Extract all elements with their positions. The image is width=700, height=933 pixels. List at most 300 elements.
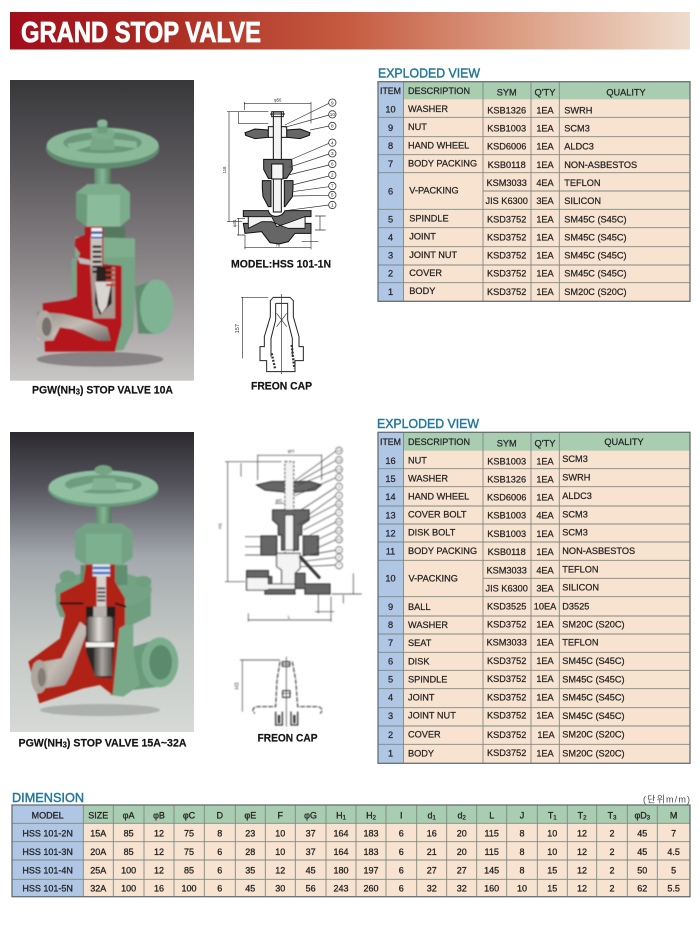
table: dimension: 25A	[90, 865, 106, 875]
diagram: section 15A-32A: φH	[288, 449, 294, 454]
table: dimension: HSS 101-2N	[22, 829, 73, 839]
table: dimension: φC	[183, 810, 196, 820]
table: dimension: d	[458, 810, 463, 820]
table: dimension: 12	[275, 865, 285, 875]
table: exploded view 2: 1EA	[536, 529, 555, 539]
table: dimension: 12	[154, 847, 164, 857]
table: dimension: 85	[124, 829, 134, 839]
table: exploded view 2: JOINT	[408, 693, 435, 703]
diagram: HSS 101-1N section	[222, 97, 336, 249]
table: exploded view 2: 15	[385, 474, 396, 484]
table: exploded view 1: 4EA	[536, 178, 555, 188]
table: dimension: 6	[217, 883, 222, 893]
table: dimension: 5.5	[667, 883, 680, 893]
callout numbers: 3	[331, 151, 334, 156]
table: dimension: 75	[184, 829, 194, 839]
table: dimension: 6	[399, 829, 404, 839]
caption: valve 10A: 3	[76, 388, 80, 396]
table: exploded view 2: 11	[386, 547, 395, 557]
table: exploded view 2: 1EA	[537, 730, 556, 740]
callout numbers: 9	[338, 547, 341, 552]
table: exploded view 2: JOINT NUT	[408, 711, 456, 721]
table: dimension: F	[278, 810, 284, 820]
table: dimension: 30	[275, 883, 285, 893]
table: dimension: H	[336, 810, 343, 820]
callout numbers: 10	[337, 519, 342, 524]
table: dimension: 20	[457, 847, 467, 857]
table: dimension: 115	[485, 829, 499, 839]
callout numbers: 8	[331, 124, 334, 129]
table: exploded view 2: 3EA	[536, 583, 555, 593]
table: dimension: 8	[519, 847, 525, 857]
table: exploded view 1: 10	[385, 105, 396, 115]
table: exploded view 2: SYM	[497, 438, 517, 448]
table: exploded view 2: DISK	[408, 656, 430, 666]
table: dimension: 56	[306, 883, 316, 893]
diagram: freon cap 2: H3	[234, 683, 240, 689]
table: exploded view 1: 3	[388, 250, 393, 260]
table: dimension: 85	[124, 847, 134, 857]
diagram: section 15A-32A: H1	[218, 523, 223, 529]
diagram: freon cap 1: 157	[235, 324, 241, 333]
table: exploded view 1: COVER	[409, 268, 442, 278]
table: exploded view 2: V-PACKING	[408, 573, 458, 583]
table: exploded view 1: SM45C (S45C)	[564, 269, 627, 279]
table: exploded view 2: 1EA	[536, 638, 555, 648]
table: exploded view 2: 1EA	[536, 692, 555, 702]
table: exploded view 1: 8	[388, 141, 393, 151]
table: exploded view 1: KSM3033	[487, 178, 527, 188]
table: exploded view 2: 4EA	[536, 565, 555, 575]
table: dimension: 32A	[90, 883, 106, 893]
table: exploded view 1: V-PACKING	[409, 186, 459, 196]
table: dimension: 160	[484, 883, 499, 893]
table: exploded view 2: KSB0118	[488, 547, 526, 557]
table: dimension: 45	[306, 865, 316, 875]
table: exploded view 2: KSM3033	[487, 565, 527, 575]
table: dimension: 15	[547, 883, 557, 893]
table: exploded view 2: 16	[385, 456, 396, 466]
table: dimension: 10	[547, 829, 557, 839]
unit note: (단위m/m)	[643, 794, 690, 804]
table: dimension: 12	[577, 865, 587, 875]
table: dimension: 2	[609, 829, 615, 839]
table: dimension: 8	[519, 865, 525, 875]
table: dimension: MODEL	[32, 810, 64, 820]
table: dimension: 164	[333, 829, 349, 839]
table: exploded view 2: SM45C (S45C)	[562, 711, 625, 721]
table: exploded view 1: JOINT NUT	[409, 250, 457, 260]
table: exploded view 2: NUT	[408, 455, 427, 465]
table: dimension: T	[608, 810, 613, 820]
table: dimension: 6	[399, 847, 404, 857]
table: exploded view 1: WASHER	[408, 104, 448, 114]
table: exploded view 2: 1	[388, 748, 393, 758]
table: dimension: 45	[637, 847, 647, 857]
table: exploded view 2: COVER BOLT	[408, 510, 467, 520]
table: exploded view 2: Q'TY	[534, 438, 556, 448]
table: exploded view 1: 1EA	[536, 124, 555, 134]
callout numbers: 4	[331, 140, 334, 145]
table: exploded view 2: TEFLON	[562, 638, 599, 648]
table: dimension: φB	[153, 810, 165, 820]
table: exploded view 2: ITEM	[380, 437, 401, 447]
table: exploded view 1: 1	[388, 287, 393, 297]
callout numbers: 12	[337, 537, 342, 542]
callout numbers: 3	[338, 484, 341, 489]
table: dimension: φG	[304, 810, 317, 820]
table: exploded view 2: KSD3752	[487, 674, 526, 684]
diagram: section 15A-32A: φG	[276, 498, 283, 503]
table: exploded view 2: 1EA	[536, 492, 555, 502]
table: exploded view 2: 1EA	[536, 547, 555, 557]
diagram: HSS 101-1N section: 76	[275, 243, 281, 248]
callout numbers: 4	[338, 493, 341, 498]
table: dimension: HSS 101-5N	[22, 883, 73, 893]
table: exploded view 1: KSD3752	[487, 214, 526, 224]
table: exploded view 1: SPINDLE	[409, 214, 449, 224]
table: dimension: 21	[427, 847, 437, 857]
table: exploded view 2: HAND WHEEL	[408, 492, 469, 502]
table: exploded view 1: 6	[388, 186, 393, 196]
heading: dimension: DIMENSION	[12, 790, 84, 805]
table: exploded view 1: JIS K6300	[485, 196, 528, 206]
table: exploded view 2: D3525	[562, 601, 589, 611]
table: dimension: 12	[577, 883, 587, 893]
diagram: HSS 101-1N section: 118	[222, 166, 227, 173]
table: dimension: 45	[637, 829, 647, 839]
table: exploded view 2: NON-ASBESTOS	[562, 546, 635, 556]
callout numbers: 10	[330, 112, 335, 117]
table: dimension: 6	[399, 865, 404, 875]
callout numbers: 9	[331, 100, 334, 105]
table: exploded view 1: Q'TY	[534, 87, 556, 97]
table: exploded view 1: NON-ASBESTOS	[564, 160, 637, 170]
table: exploded view 1: BODY PACKING	[408, 158, 477, 168]
table: exploded view 1: SM20C (S20C)	[564, 287, 627, 297]
heading: exploded view 2: EXPLODED VIEW	[377, 416, 480, 431]
table: exploded view 2: KSD6006	[487, 492, 526, 502]
callout numbers: 11	[337, 501, 342, 506]
table: exploded view 2: 1EA	[536, 674, 555, 684]
table: exploded view 2: KSM3033	[487, 638, 527, 648]
caption: valve 15A-32A: ) STOP VALVE 15A~32A	[67, 738, 187, 750]
table: dimension: 115	[485, 847, 499, 857]
callout numbers: 15	[337, 457, 342, 462]
table: dimension: φE	[244, 810, 256, 820]
table: exploded view 2: SCM3	[562, 454, 588, 464]
callout numbers: 13	[337, 528, 342, 533]
table: exploded view 2: KSB1326	[487, 474, 526, 484]
table: dimension: φA	[123, 810, 135, 820]
table: exploded view 2: SCM3	[562, 509, 588, 519]
table: dimension: 27	[457, 865, 467, 875]
table: exploded view 1: 4	[388, 232, 393, 242]
table: exploded view 2: 9	[388, 602, 393, 612]
table: exploded view 1: SM45C (S45C)	[564, 232, 627, 242]
table: dimension: D	[217, 810, 224, 820]
table: exploded view 1: KSD3752	[487, 287, 526, 297]
table: dimension: 75	[184, 847, 194, 857]
callout numbers: 2	[331, 173, 334, 178]
table: exploded view 1: 1EA	[536, 269, 555, 279]
table: dimension: 2	[609, 847, 615, 857]
table: exploded view 2: 1EA	[536, 711, 555, 721]
table: exploded view 2: KSB1003	[487, 511, 526, 521]
table: exploded view 1: KSD3752	[487, 269, 526, 279]
table: exploded view 2: KSD3752	[487, 620, 526, 630]
table: exploded view 2: 6	[388, 656, 393, 666]
table: exploded view 1: HAND WHEEL	[408, 140, 469, 150]
caption: valve 10A: PGW(NH	[32, 384, 78, 396]
table: exploded view 1	[378, 82, 690, 301]
table: exploded view 2: WASHER	[408, 620, 448, 630]
table: dimension: 183	[363, 847, 379, 857]
table: exploded view 1: KSB1326	[487, 105, 526, 115]
table: exploded view 1: 5	[388, 214, 393, 224]
table: exploded view 2: TEFLON	[562, 564, 599, 574]
callout numbers: 7	[331, 184, 334, 189]
table: exploded view 1: SM45C (S45C)	[564, 250, 627, 260]
table: exploded view 2: 13	[385, 510, 396, 520]
table: exploded view 2: 3	[388, 711, 393, 721]
table: dimension: 243	[333, 883, 349, 893]
table: exploded view 1: 9	[388, 123, 393, 133]
table: exploded view 2: SM45C (S45C)	[562, 693, 625, 703]
table: dimension: 27	[427, 865, 437, 875]
table: exploded view 1: KSD3752	[487, 232, 526, 242]
table: exploded view 1: 1EA	[536, 232, 555, 242]
table: exploded view 2: KSB1003	[487, 456, 526, 466]
heading: exploded view 1: EXPLODED VIEW	[378, 66, 481, 80]
table: exploded view 1: SWRH	[564, 105, 592, 115]
table: dimension: T	[548, 810, 553, 820]
table: exploded view 1: NUT	[408, 122, 427, 132]
table: exploded view 2: COVER	[408, 730, 441, 740]
table: dimension: 2	[373, 815, 377, 821]
table: exploded view 1: 3EA	[536, 196, 555, 206]
table: dimension: 35	[245, 865, 255, 875]
table: dimension: H	[366, 810, 373, 820]
table: exploded view 1: DESCRIPTION	[408, 86, 470, 96]
table: dimension: 6	[217, 847, 222, 857]
table: dimension: HSS 101-3N	[22, 847, 73, 857]
table: exploded view 2: SM20C (S20C)	[562, 730, 625, 740]
table: dimension: 3	[613, 815, 617, 821]
table: exploded view 1: 1EA	[536, 287, 555, 297]
table: dimension: HSS 101-4N	[22, 865, 73, 875]
table: exploded view 1: KSD6006	[487, 142, 526, 152]
table: dimension: 1	[553, 815, 557, 821]
table: exploded view 1: KSB0118	[488, 160, 526, 170]
diagram: freon cap 1	[235, 294, 303, 374]
table: exploded view 2: 12	[385, 528, 396, 538]
callout numbers: 2	[338, 510, 341, 515]
table: dimension: 10	[517, 883, 527, 893]
table: exploded view 1: SILICON	[564, 196, 601, 206]
table: exploded view 2: BODY	[408, 749, 434, 759]
table: exploded view 2: 7	[388, 638, 393, 648]
table: exploded view 2: SM45C (S45C)	[562, 656, 625, 666]
table: exploded view 2: 8	[388, 620, 393, 630]
callout numbers: 5	[338, 475, 341, 480]
table: dimension: 45	[245, 883, 255, 893]
table: exploded view 2	[378, 432, 690, 763]
table: dimension: 1	[343, 815, 347, 821]
callout numbers	[329, 99, 336, 209]
table: dimension: 2	[463, 815, 467, 821]
caption: freon cap 1: FREON CAP	[251, 380, 312, 392]
table: exploded view 2: JIS K6300	[485, 583, 528, 593]
table: exploded view 1: 1EA	[536, 142, 555, 152]
table: exploded view 2: SEAT	[408, 638, 432, 648]
table: dimension: 28	[245, 847, 255, 857]
table: exploded view 2: SCM3	[562, 528, 588, 538]
callout numbers: 1	[331, 203, 334, 208]
table: dimension: T	[578, 810, 583, 820]
table: exploded view 1: KSB1003	[487, 124, 526, 134]
table: exploded view 2: 1EA	[536, 620, 555, 630]
table: dimension: 16	[154, 883, 164, 893]
table: exploded view 1: KSD3752	[487, 250, 526, 260]
table: exploded view 1: 7	[388, 159, 393, 169]
table: exploded view 1: ALDC3	[564, 142, 594, 152]
caption: model HSS 101-1N: MODEL:HSS 101-1N	[231, 258, 331, 270]
table: dimension: 10	[547, 847, 557, 857]
table: exploded view 2: DESCRIPTION	[408, 437, 470, 447]
table: exploded view 2: 2	[388, 730, 393, 740]
table: dimension: 100	[121, 883, 136, 893]
table: exploded view 1: JOINT	[409, 232, 436, 242]
caption: valve 15A-32A: PGW(NH	[18, 738, 64, 750]
table: dimension: 1	[433, 815, 437, 821]
table: exploded view 1: 1EA	[536, 105, 555, 115]
table: exploded view 1: SCM3	[564, 124, 590, 134]
table: dimension: 10	[275, 829, 285, 839]
photo: valve 10A	[10, 80, 194, 381]
callout numbers: 8	[338, 555, 341, 560]
table: exploded view 2: WASHER	[408, 473, 448, 483]
diagram: section 15A-32A: L	[288, 614, 291, 619]
table: dimension: 23	[245, 829, 255, 839]
photo: valve 15A-32A	[10, 432, 194, 732]
table: exploded view 2: 1EA	[536, 656, 555, 666]
table: exploded view 2: KSD3752	[487, 711, 526, 721]
table: exploded view 1: ITEM	[380, 86, 401, 96]
table: dimension: 37	[306, 829, 316, 839]
table: exploded view 1: SM45C (S45C)	[564, 214, 627, 224]
table: dimension: 183	[363, 829, 379, 839]
table: dimension: L	[489, 810, 494, 820]
diagram: freon cap 2	[234, 657, 322, 727]
table: dimension: 260	[363, 883, 379, 893]
table: dimension: 85	[184, 865, 194, 875]
table: exploded view 2: KSD3752	[487, 656, 526, 666]
callout numbers: 7	[338, 563, 341, 568]
table: exploded view 2: BODY PACKING	[408, 546, 477, 556]
diagram: HSS 101-1N section: φ56	[274, 97, 282, 102]
table: dimension: 100	[181, 883, 197, 893]
table: dimension: 10	[275, 847, 285, 857]
table: dimension: 145	[484, 865, 499, 875]
table: exploded view 1: SYM	[497, 87, 517, 97]
table: exploded view 2: 14	[385, 492, 396, 502]
table: dimension: 15A	[90, 829, 106, 839]
table: dimension: 2	[583, 815, 587, 821]
table: exploded view 2: KSD3752	[487, 730, 526, 740]
table: dimension: 164	[333, 847, 349, 857]
table: exploded view 1: 1EA	[536, 160, 555, 170]
table: exploded view 2: SWRH	[562, 473, 590, 483]
table: dimension: 197	[363, 865, 379, 875]
table: dimension: 62	[637, 883, 647, 893]
table: dimension: 16	[427, 829, 437, 839]
table: dimension: 37	[306, 847, 316, 857]
table: dimension: 8	[519, 829, 525, 839]
table: dimension: 32	[457, 883, 467, 893]
callout numbers: 16	[337, 448, 342, 453]
table: dimension	[12, 805, 690, 897]
caption: valve 10A: ) STOP VALVE 10A	[80, 384, 173, 396]
table: exploded view 1: QUALITY	[606, 87, 646, 97]
table: dimension: 100	[121, 865, 136, 875]
table: dimension: 4.5	[667, 847, 680, 857]
table: exploded view 2: KSB1003	[487, 529, 526, 539]
table: dimension: 12	[577, 829, 587, 839]
table: dimension: 15	[547, 865, 557, 875]
callout numbers: 6	[331, 162, 334, 167]
table: dimension: 50	[637, 865, 647, 875]
table: dimension: 12	[577, 847, 587, 857]
table: exploded view 2: 5	[388, 674, 393, 684]
table: dimension: 8	[217, 829, 222, 839]
table: exploded view 2: SPINDLE	[408, 674, 447, 684]
caption: freon cap 2: FREON CAP	[258, 732, 318, 744]
table: exploded view 2: 10EA	[534, 601, 557, 611]
table: exploded view 2: DISK BOLT	[408, 528, 456, 538]
callout numbers	[336, 447, 342, 569]
table: dimension: 180	[333, 865, 349, 875]
table: dimension: 12	[154, 865, 164, 875]
table: exploded view 2: SM20C (S20C)	[562, 748, 625, 758]
diagram: section 15A-32A	[218, 447, 362, 622]
table: dimension: φD	[634, 810, 647, 820]
table: exploded view 2: 10	[385, 574, 396, 584]
table: exploded view 1: 1EA	[536, 250, 555, 260]
table: exploded view 2: KSD3525	[487, 601, 526, 611]
table: exploded view 2: QUALITY	[604, 437, 644, 447]
title: GRAND STOP VALVE	[21, 17, 261, 49]
table: dimension: 7	[671, 829, 676, 839]
table: exploded view 2: ALDC3	[562, 491, 592, 501]
table: dimension: 32	[427, 883, 437, 893]
table: exploded view 2: KSD3752	[487, 692, 526, 702]
table: exploded view 2: KSD3752	[487, 748, 526, 758]
table: exploded view 2: 4EA	[536, 511, 555, 521]
table: dimension: 6	[399, 883, 404, 893]
table: exploded view 2: 1EA	[536, 474, 555, 484]
table: exploded view 2: 1EA	[536, 748, 555, 758]
table: exploded view 2: SM45C (S45C)	[562, 674, 625, 684]
table: dimension: 20A	[90, 847, 106, 857]
table: dimension: 2	[609, 883, 615, 893]
table: dimension: d	[428, 810, 433, 820]
table: dimension: 5	[671, 865, 676, 875]
table: dimension: J	[520, 810, 524, 820]
diagram: HSS 101-1N section: φ31	[232, 219, 237, 227]
table: dimension: I	[400, 810, 403, 820]
table: dimension: 3	[647, 815, 651, 821]
